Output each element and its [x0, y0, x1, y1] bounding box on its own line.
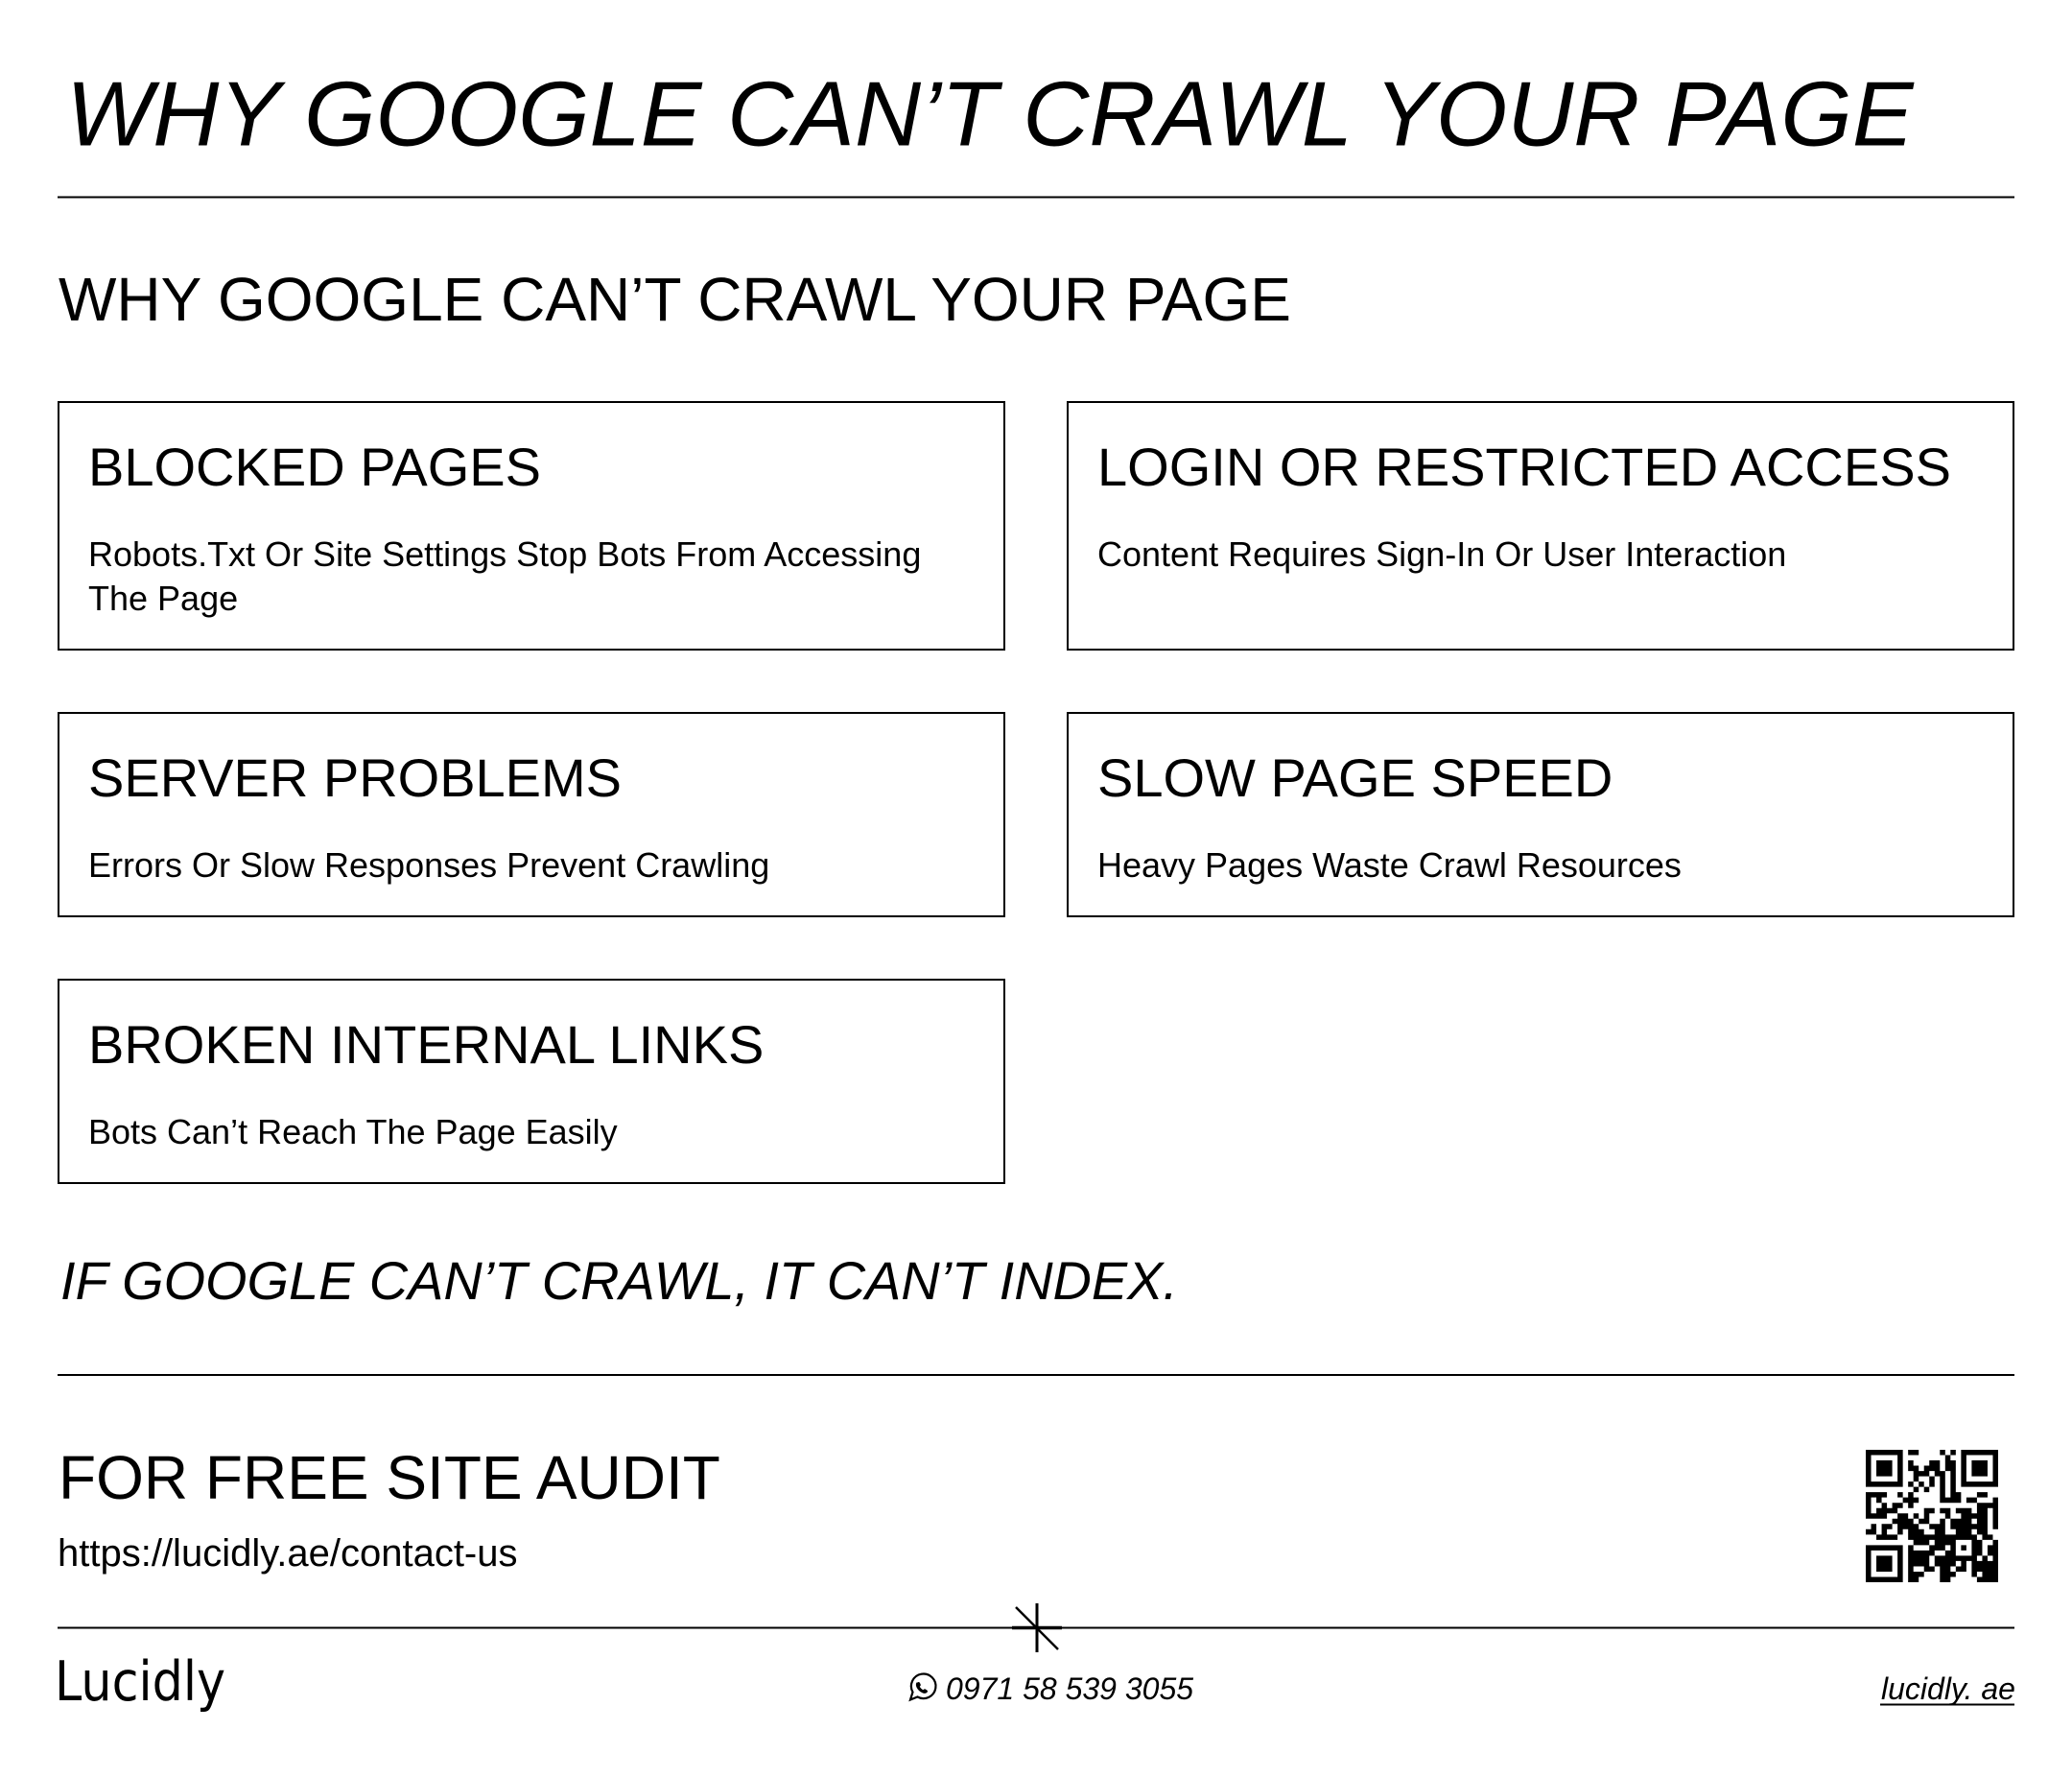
takeaway statement: IF GOOGLE CAN’T CRAWL, IT CAN’T INDEX.: [60, 1250, 1178, 1311]
icon: star mark on divider: [1012, 1603, 1062, 1652]
panel: login or restricted access: [1068, 402, 2013, 650]
panel: slow page speed: SLOW PAGE SPEED: [1097, 747, 1613, 808]
icon: whatsapp: [910, 1674, 935, 1700]
panel: broken internal links: Bots Can’t Reach The Page Easily: [88, 1112, 618, 1151]
title: WHY GOOGLE CAN’T CRAWL YOUR PAGE: [66, 63, 1915, 165]
panel: blocked pages: Robots.Txt Or Site Settings Stop Bots From Accessing: [88, 534, 921, 574]
logo: Lucidly: Lucidly: [55, 1650, 225, 1714]
contact url: https://lucidly.ae/contact-us: [58, 1532, 518, 1575]
panel: slow page speed: Heavy Pages Waste Crawl Resources: [1097, 845, 1682, 885]
panel: blocked pages: The Page: [88, 579, 238, 618]
website link: lucidly. ae: [1881, 1671, 2015, 1706]
panel: login or restricted access: Content Requires Sign-In Or User Interaction: [1097, 534, 1786, 574]
panel: server problems: Errors Or Slow Responses Prevent Crawling: [88, 845, 769, 885]
icon: qr code: [1866, 1453, 1998, 1579]
phone number: 0971 58 539 3055: [946, 1671, 1193, 1706]
panel: broken internal links: BROKEN INTERNAL LINKS: [88, 1014, 764, 1075]
panel: server problems: [59, 713, 1004, 916]
section heading: WHY GOOGLE CAN’T CRAWL YOUR PAGE: [59, 265, 1291, 334]
panel: blocked pages: [59, 402, 1004, 650]
panel: broken internal links: [59, 980, 1004, 1183]
panel: server problems: SERVER PROBLEMS: [88, 747, 622, 808]
panel: login or restricted access: LOGIN OR RESTRICTED ACCESS: [1097, 437, 1951, 497]
call to action heading: FOR FREE SITE AUDIT: [59, 1443, 720, 1512]
panel: blocked pages: BLOCKED PAGES: [88, 437, 541, 497]
panel: slow page speed: [1068, 713, 2013, 916]
